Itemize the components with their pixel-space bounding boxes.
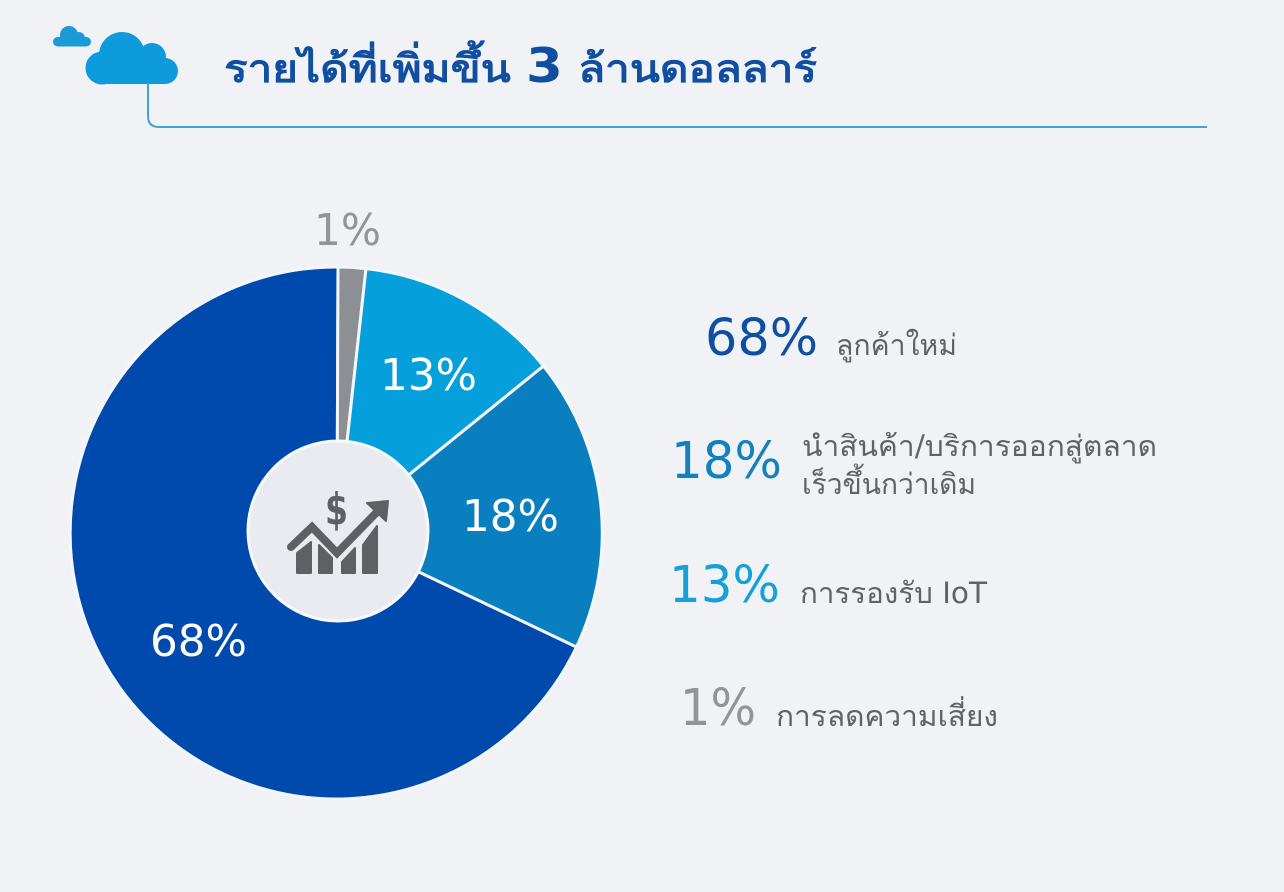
legend item: 1%: 1% — [680, 679, 756, 738]
label: 1% outside: 1% — [314, 205, 381, 256]
legend — [669, 309, 1157, 738]
label: 13%: 13% — [380, 350, 477, 401]
legend item: 68%: 68% — [705, 309, 818, 368]
legend item: 13%: การรองรับ IoT — [800, 576, 987, 610]
icon: small cloud — [53, 26, 91, 46]
legend item: 18% — [671, 429, 1157, 501]
legend item: 68% — [705, 309, 957, 368]
legend item: 18%: 18% — [671, 432, 782, 491]
icon: large cloud — [86, 32, 178, 84]
donut chart — [70, 205, 602, 799]
legend item: 1%: การลดความเสี่ยง — [776, 696, 998, 733]
legend item: 18%: เร็วขึ้นกว่าเดิม — [802, 463, 976, 501]
label: 18%: 18% — [462, 491, 559, 542]
header connector line — [148, 83, 1207, 127]
title: รายได้ที่เพิ่มขึ้น 3 ล้านดอลลาร์ — [224, 39, 817, 94]
icon: revenue growth chart — [291, 484, 388, 573]
center circle — [248, 441, 428, 621]
slice: 68% new customers — [70, 267, 577, 799]
legend item: 13% — [669, 556, 987, 615]
legend item: 68%: ลูกค้าใหม่ — [836, 328, 957, 363]
legend item: 18%: นำสินค้า/บริการออกสู่ตลาด — [802, 429, 1157, 464]
slice: 18% faster to market — [337, 366, 602, 647]
label: 68%: 68% — [150, 616, 247, 667]
icon: dollar sign: $ — [325, 484, 348, 535]
slice: 1% risk reduction — [337, 267, 366, 533]
slice: 13% IoT — [337, 269, 544, 533]
legend item: 13%: 13% — [669, 556, 780, 615]
legend item: 1% — [680, 679, 998, 738]
